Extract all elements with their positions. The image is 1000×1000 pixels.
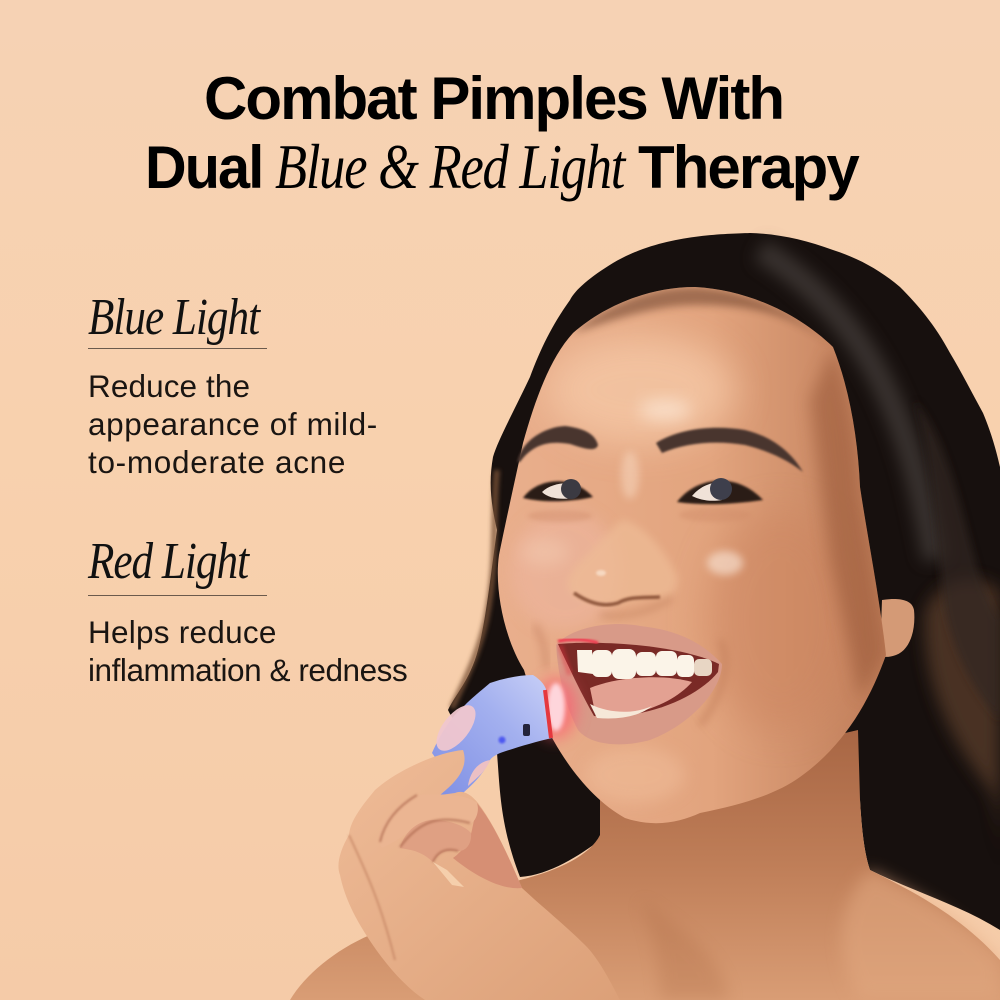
text: Blue Light benefit: appearance of mild-	[88, 406, 378, 442]
mouth	[556, 624, 722, 744]
heading: Blue Light: Blue Light	[88, 289, 259, 346]
text: Red Light benefit: Helps reduce	[88, 614, 277, 650]
photo: smiling woman using light therapy device	[290, 233, 1000, 1000]
gap between fingers	[433, 862, 464, 887]
text: Blue Light benefit	[88, 368, 378, 480]
text: Red Light benefit	[88, 614, 407, 688]
text: Blue Light benefit: to-moderate acne	[88, 444, 346, 480]
title	[145, 65, 860, 202]
neck and shoulders	[290, 730, 1000, 1000]
title: Combat Pimples With	[204, 65, 783, 132]
text: Blue Light benefit: Reduce the	[88, 368, 250, 404]
hand	[338, 750, 620, 1000]
title: Dual	[145, 134, 262, 201]
teeth	[577, 649, 712, 679]
title: Blue & Red Light	[275, 131, 624, 202]
title: Therapy	[638, 134, 858, 201]
heading: Red Light: Red Light	[88, 533, 248, 590]
eyes	[523, 478, 763, 504]
light therapy device	[429, 675, 576, 796]
thumb	[453, 803, 522, 888]
text: Red Light benefit: inflammation & redness	[88, 652, 407, 688]
ear	[880, 599, 914, 657]
nose	[567, 520, 677, 616]
eyebrows	[517, 426, 803, 472]
hair	[448, 233, 1000, 930]
face	[498, 287, 886, 824]
